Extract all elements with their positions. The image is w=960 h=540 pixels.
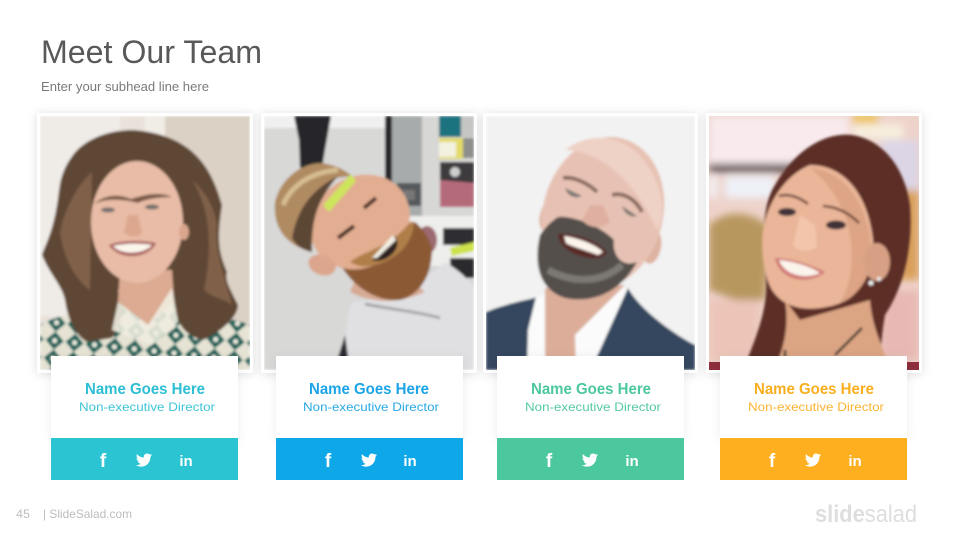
- icon: facebook: f: [769, 451, 776, 472]
- role: Non-executive Director: [748, 400, 884, 414]
- role: Non-executive Director: [525, 400, 661, 414]
- icon: facebook: f: [546, 451, 553, 472]
- panel: team member 2: [261, 113, 477, 480]
- page number: 45: [16, 507, 30, 521]
- name: Name Goes Here: [754, 381, 874, 398]
- social bar: [720, 438, 907, 480]
- panel: team member 3: [483, 113, 698, 480]
- panel: team member 4: [706, 113, 922, 480]
- role: Non-executive Director: [303, 400, 439, 414]
- icon: twitter: [582, 454, 598, 467]
- name card: [51, 356, 238, 438]
- footer logo: slidesalad: [815, 501, 917, 528]
- name card: [276, 356, 463, 438]
- icon: facebook: f: [325, 451, 332, 472]
- name card: [720, 356, 907, 438]
- photo: laughing bald man: [486, 116, 695, 370]
- photo frame: [261, 113, 477, 373]
- icon: linkedin: in: [625, 453, 639, 470]
- photo frame: [706, 113, 922, 373]
- icon: twitter: [805, 454, 821, 467]
- name card: [497, 356, 684, 438]
- icon: facebook: f: [100, 451, 107, 472]
- footer site name: | SlideSalad.com: [43, 507, 132, 521]
- photo frame: [37, 113, 253, 373]
- social bar: [497, 438, 684, 480]
- photo frame: [483, 113, 698, 373]
- social bar: [51, 438, 238, 480]
- icon: twitter: [361, 454, 377, 467]
- subhead: Enter your subhead line here: [41, 79, 209, 94]
- panel: team member 1: [37, 113, 253, 480]
- title: Meet Our Team: [41, 34, 262, 70]
- photo: smiling woman with curly hair: [40, 116, 250, 370]
- icon: linkedin: in: [403, 453, 417, 470]
- name: Name Goes Here: [309, 381, 429, 398]
- role: Non-executive Director: [79, 400, 215, 414]
- icon: linkedin: in: [848, 453, 862, 470]
- photo: smiling woman with dark hair: [709, 116, 919, 370]
- photo: bearded man with sticky note: [264, 116, 474, 370]
- icon: twitter: [136, 454, 152, 467]
- icon: linkedin: in: [179, 453, 193, 470]
- name: Name Goes Here: [85, 381, 205, 398]
- name: Name Goes Here: [531, 381, 651, 398]
- social bar: [276, 438, 463, 480]
